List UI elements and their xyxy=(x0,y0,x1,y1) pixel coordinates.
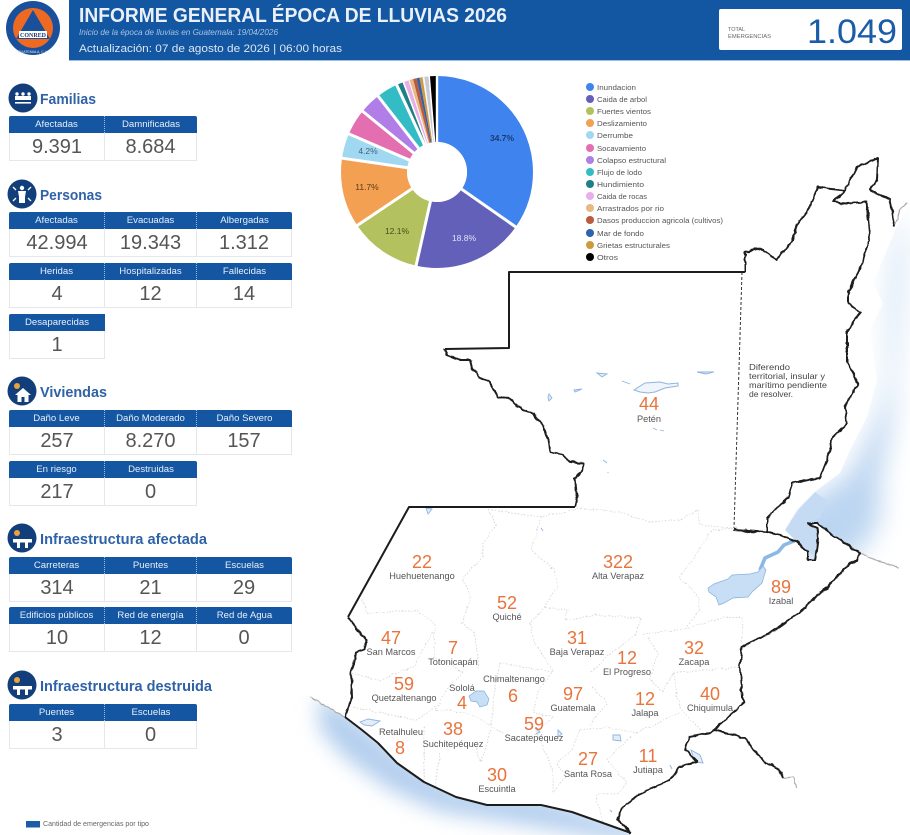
country border xyxy=(345,158,895,833)
lake Peten Itza xyxy=(634,382,678,393)
Huehuetenango: 22 xyxy=(412,552,432,572)
Pacific gradient xyxy=(318,695,640,835)
Santa Rosa: 27 xyxy=(578,749,598,769)
section heading: Infraestructura afectada: Infraestructura afectada xyxy=(40,531,208,548)
total emergencies box: 1.049 xyxy=(807,13,897,51)
pie legend: Inundacion xyxy=(597,83,636,92)
table: Personas row 1: 42.994 xyxy=(26,232,88,254)
Escuintla: Escuintla xyxy=(478,784,517,794)
total emergencies box: TOTAL xyxy=(728,27,745,33)
Quiché xyxy=(492,593,522,622)
table: Infraestructura afectada row 2: Red de energía xyxy=(117,610,184,621)
Quetzaltenango: 59 xyxy=(394,674,414,694)
disputed territory note xyxy=(749,362,827,399)
table: Viviendas row 1: 257 xyxy=(40,430,74,452)
San Marcos: San Marcos xyxy=(366,647,416,657)
table: Familias: 8.684 xyxy=(125,136,176,158)
Jalapa xyxy=(631,689,659,718)
Jutiapa: 11 xyxy=(639,746,657,766)
Totonicapán xyxy=(428,638,478,667)
icon: family xyxy=(15,92,31,104)
El Progreso xyxy=(603,648,651,677)
Alta Verapaz xyxy=(592,552,644,581)
Escuintla: 30 xyxy=(487,765,507,785)
table: Personas row 2: Fallecidas xyxy=(223,266,266,277)
Zacapa: 32 xyxy=(684,638,704,658)
table: Viviendas row 1: Daño Severo xyxy=(216,413,272,424)
Jalapa: 12 xyxy=(635,689,655,709)
table: Familias: Damnificadas xyxy=(122,119,180,130)
Zacapa xyxy=(679,638,710,667)
Baja Verapaz xyxy=(550,628,605,657)
pie legend: Arrastrados por rio xyxy=(597,204,664,213)
Zacapa: Zacapa xyxy=(679,657,710,667)
Petén: 44 xyxy=(639,394,659,414)
table: Personas row 3: Desaparecidas xyxy=(25,317,89,328)
table: Infraestructura destruida: Escuelas xyxy=(132,707,170,718)
department boundaries xyxy=(351,508,742,823)
disputed territory note: territorial, insular y xyxy=(749,371,826,381)
El Progreso: 12 xyxy=(617,648,637,668)
table: Viviendas row 2: 217 xyxy=(40,481,74,503)
pie legend xyxy=(586,83,723,262)
Retalhuleu: 8 xyxy=(395,738,405,758)
Jutiapa xyxy=(633,746,664,775)
Suchitepéquez: Suchitepéquez xyxy=(423,739,484,749)
pie legend: Caida de arbol xyxy=(597,95,647,104)
table: Infraestructura destruida: Puentes xyxy=(39,707,74,718)
section heading: Familias xyxy=(8,84,96,112)
Chimaltenango: Chimaltenango xyxy=(483,674,545,684)
water bodies xyxy=(360,372,794,812)
Baja Verapaz: 31 xyxy=(567,628,587,648)
Huehuetenango: Huehuetenango xyxy=(389,571,455,581)
table: Personas row 1: 19.343 xyxy=(120,232,181,254)
table: Familias: 9.391 xyxy=(32,136,82,158)
table: Viviendas row 1: 157 xyxy=(227,430,261,452)
section heading: Familias: Familias xyxy=(40,91,96,108)
total emergencies box: EMERGENCIAS xyxy=(728,34,771,40)
pie legend: Deslizamiento xyxy=(597,119,647,128)
Huehuetenango xyxy=(389,552,455,581)
Suchitepéquez: 38 xyxy=(443,719,463,739)
total emergencies box xyxy=(719,9,902,51)
Sacatepéquez: 59 xyxy=(524,714,544,734)
table: Viviendas row 2: Destruidas xyxy=(128,464,174,475)
section heading: Infraestructura destruida: Infraestructura destruida xyxy=(40,678,213,695)
table: Personas row 2: 12 xyxy=(139,283,162,305)
table: Viviendas row 2: En riesgo xyxy=(36,464,77,475)
table: Personas row 3 xyxy=(9,314,105,359)
Chimaltenango: 6 xyxy=(508,686,518,706)
section heading: Infraestructura destruida xyxy=(8,670,213,700)
table: Personas row 2: 14 xyxy=(233,283,255,305)
CONRED logo xyxy=(6,1,60,55)
title: INFORME GENERAL ÉPOCA DE LLUVIAS 2026 xyxy=(79,4,507,27)
lake Izabal xyxy=(708,566,766,605)
icon: person xyxy=(13,186,31,203)
Chiquimula: Chiquimula xyxy=(687,703,734,713)
disputed territory note: marítimo pendiente xyxy=(749,380,827,390)
table: Infraestructura afectada row 2 xyxy=(9,607,292,652)
Baja Verapaz: Baja Verapaz xyxy=(550,647,605,657)
pie legend: Caida de rocas xyxy=(597,192,647,201)
table: Infraestructura afectada row 1 xyxy=(9,557,292,602)
Quetzaltenango: Quetzaltenango xyxy=(372,693,436,703)
icon: house xyxy=(14,383,31,402)
pie legend: Hundimiento xyxy=(597,180,644,189)
Guatemala xyxy=(551,684,596,713)
table: Personas row 3: 1 xyxy=(51,334,63,356)
update date: Actualización: 07 de agosto de 2026 | 06:00 horas xyxy=(79,43,343,55)
table: Infraestructura afectada row 1: 29 xyxy=(233,577,255,599)
Retalhuleu xyxy=(379,727,423,758)
table: Infraestructura afectada row 1: 314 xyxy=(40,577,74,599)
CONRED logo: CONRED xyxy=(20,33,47,39)
donut chart: emergencies by type xyxy=(341,76,533,268)
Jalapa: Jalapa xyxy=(631,708,659,718)
table: Personas row 1: Afectadas xyxy=(35,215,78,226)
icon: bridge xyxy=(13,530,32,548)
Alta Verapaz: Alta Verapaz xyxy=(592,571,644,581)
Sololá: 4 xyxy=(457,693,467,713)
Totonicapán: 7 xyxy=(448,638,458,658)
pie legend: Dasos produccion agricola (cultivos) xyxy=(597,216,723,225)
rio Dulce xyxy=(760,541,794,570)
Sacatepéquez: Sacatepéquez xyxy=(505,733,564,743)
Retalhuleu: Retalhuleu xyxy=(379,727,423,737)
donut chart: emergencies by type: 34.7% xyxy=(490,133,514,143)
donut chart: emergencies by type: 11.7% xyxy=(355,182,379,192)
Petén xyxy=(637,394,661,424)
pie legend: Mar de fondo xyxy=(597,229,644,238)
land mask xyxy=(285,62,910,835)
table: Infraestructura afectada row 1: Escuelas xyxy=(225,560,264,571)
table: Viviendas row 1: Daño Moderado xyxy=(116,413,185,424)
section heading: Personas xyxy=(8,180,102,208)
Sololá xyxy=(449,683,476,713)
Escuintla xyxy=(478,765,517,794)
San Marcos xyxy=(366,628,416,657)
table: Viviendas row 1 xyxy=(9,410,292,455)
donut chart: emergencies by type: 12.1% xyxy=(385,226,409,236)
Guatemala: Guatemala xyxy=(551,703,596,713)
Suchitepéquez xyxy=(423,719,484,749)
small lakes xyxy=(360,372,714,812)
section heading: Infraestructura afectada xyxy=(8,524,208,552)
Izabal: Izabal xyxy=(769,596,793,606)
table: Viviendas row 1: Daño Leve xyxy=(33,413,80,424)
header banner xyxy=(69,0,910,61)
Quetzaltenango xyxy=(372,674,436,703)
table: Familias xyxy=(9,116,197,161)
table: Infraestructura afectada row 2: 10 xyxy=(46,627,68,649)
neighbouring borders xyxy=(310,203,907,787)
Izabal: 89 xyxy=(771,577,791,597)
Quiché: Quiché xyxy=(492,612,522,622)
footer legend: Cantidad de emergencias por tipo xyxy=(43,821,149,828)
Jutiapa: Jutiapa xyxy=(633,765,664,775)
bay of Amatique xyxy=(785,492,826,555)
table: Personas row 2: Hospitalizadas xyxy=(119,266,182,277)
table: Infraestructura afectada row 1: Carreteras xyxy=(34,560,79,571)
table: Infraestructura afectada row 2: 0 xyxy=(238,627,250,649)
pie legend: Socavamiento xyxy=(597,144,646,153)
table: Infraestructura afectada row 2: Edificios públicos xyxy=(20,610,93,621)
disputed territory dashed line xyxy=(734,272,742,528)
Chiquimula xyxy=(687,684,734,713)
pie legend: Grietas estructurales xyxy=(597,241,670,250)
table: Infraestructura destruida: 3 xyxy=(51,724,63,746)
Alta Verapaz: 322 xyxy=(603,552,633,572)
pie legend: Derrumbe xyxy=(597,131,633,140)
section heading: Viviendas xyxy=(8,376,107,406)
table: Personas row 1 xyxy=(9,212,292,257)
pie legend: Flujo de lodo xyxy=(597,168,642,177)
table: Viviendas row 1: 8.270 xyxy=(125,430,176,452)
table: Infraestructura afectada row 1: 21 xyxy=(139,577,162,599)
table: Personas row 2: Heridas xyxy=(40,266,73,277)
table: Infraestructura afectada row 2: 12 xyxy=(139,627,162,649)
Guatemala: 97 xyxy=(563,684,583,704)
Caribbean sea xyxy=(778,205,905,565)
table: Infraestructura destruida xyxy=(9,704,197,749)
donut chart: emergencies by type: 18.8% xyxy=(452,233,476,243)
table: Infraestructura afectada row 2: Red de Agua xyxy=(217,610,272,621)
table: Viviendas row 2 xyxy=(9,461,197,506)
Sololá: Sololá xyxy=(449,683,476,693)
table: Infraestructura destruida: 0 xyxy=(145,724,156,746)
pie legend: Fuertes vientos xyxy=(597,107,651,116)
table: Familias: Afectadas xyxy=(35,119,78,130)
table: Personas row 2: 4 xyxy=(51,283,63,305)
CONRED logo: GUATEMALA, C.A. xyxy=(18,50,48,54)
table: Personas row 2 xyxy=(9,263,292,308)
section heading: Viviendas: Viviendas xyxy=(40,384,107,401)
Petén: Petén xyxy=(637,414,661,424)
table: Personas row 1: Albergadas xyxy=(220,215,269,226)
Totonicapán: Totonicapán xyxy=(428,657,478,667)
Santa Rosa: Santa Rosa xyxy=(564,769,613,779)
table: Infraestructura afectada row 1: Puentes xyxy=(133,560,168,571)
disputed territory note: de resolver. xyxy=(749,389,793,399)
Sacatepéquez xyxy=(505,714,564,743)
Pacific ocean xyxy=(318,695,640,835)
table: Viviendas row 2: 0 xyxy=(145,481,156,503)
donut chart: emergencies by type: 4.2% xyxy=(358,146,378,156)
table: Personas row 1: 1.312 xyxy=(219,232,269,254)
El Progreso: El Progreso xyxy=(603,667,651,677)
section heading: Personas: Personas xyxy=(40,187,102,204)
map of Guatemala xyxy=(308,157,910,835)
Quiché: 52 xyxy=(497,593,517,613)
Izabal xyxy=(769,577,793,606)
icon: bridge destroyed xyxy=(13,677,32,695)
pie legend: Colapso estructural xyxy=(597,156,666,165)
subtitle: Inicio de la época de lluvias en Guatemala: 19/04/2026 xyxy=(79,27,278,37)
lake Atitlan xyxy=(469,691,489,707)
Chimaltenango xyxy=(483,674,545,706)
disputed territory note: Diferendo xyxy=(749,362,790,372)
Santa Rosa xyxy=(564,749,613,779)
Chiquimula: 40 xyxy=(700,684,720,704)
table: Personas row 1: Evacuadas xyxy=(127,215,174,226)
pie legend: Otros xyxy=(597,253,618,262)
San Marcos: 47 xyxy=(381,628,401,648)
